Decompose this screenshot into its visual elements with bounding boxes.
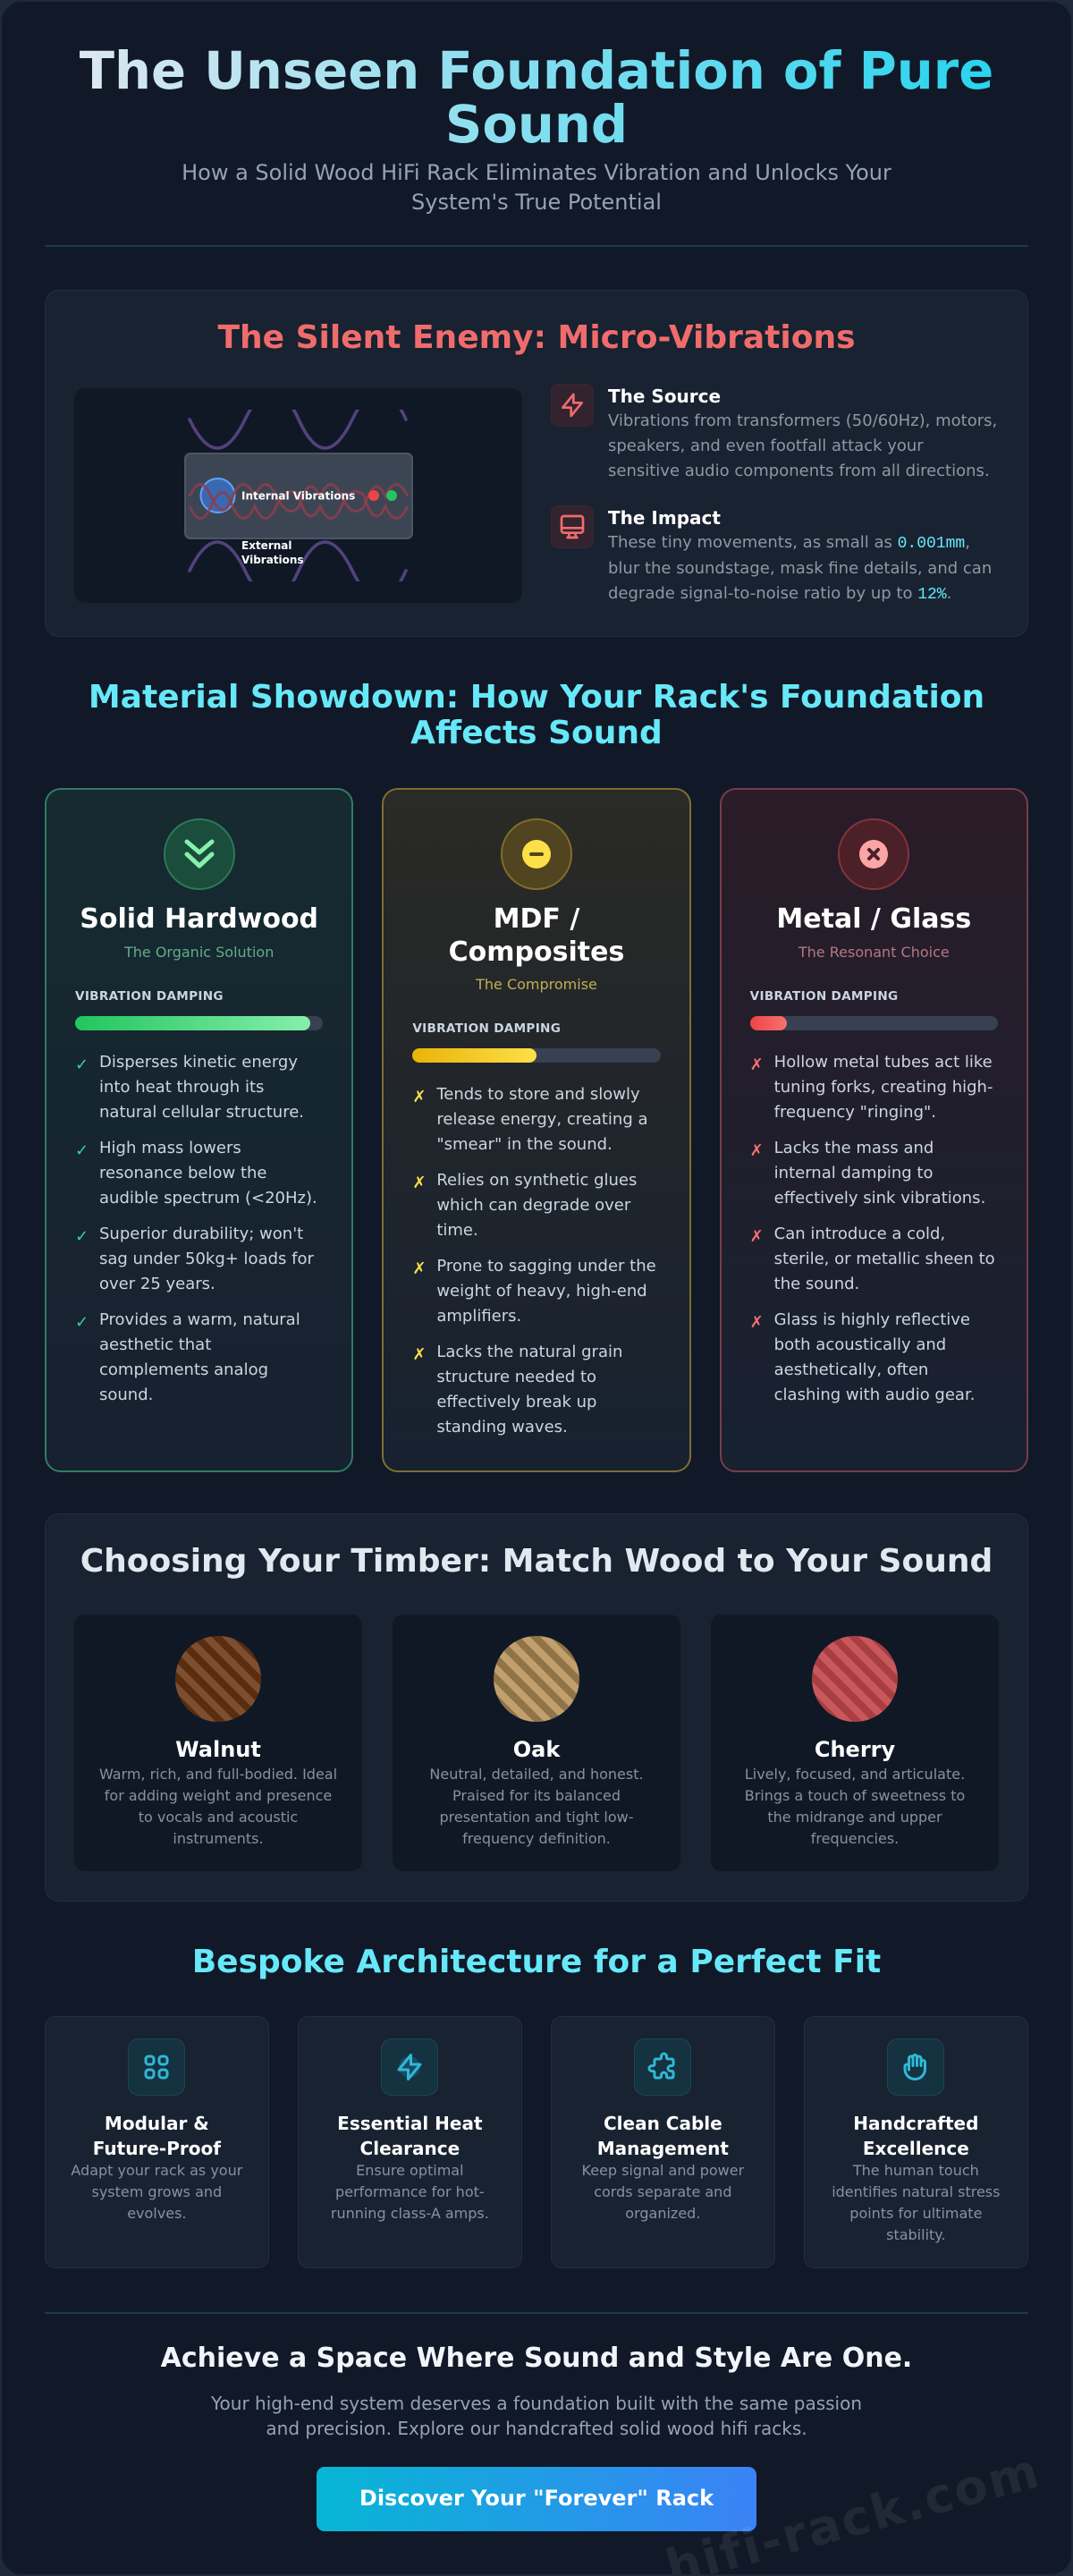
swatch: cherry: [812, 1636, 898, 1722]
text: modular: Adapt your rack as your: [71, 2162, 242, 2179]
description: cherry: [745, 1766, 965, 1847]
list: benefits: resonance below the: [99, 1164, 267, 1182]
list: drawbacks: ✗: [750, 1313, 764, 1332]
button: call to action: [317, 2467, 756, 2531]
list: drawbacks: [412, 1085, 656, 1436]
swatch: walnut: [175, 1636, 261, 1722]
text: the source: [608, 411, 997, 480]
description: cherry: Lively, focused, and articulate.: [745, 1766, 965, 1783]
card: metal glass: [720, 788, 1028, 1472]
list: benefits: into heat through its: [99, 1078, 264, 1097]
list: drawbacks: Relies on synthetic glues: [436, 1171, 637, 1190]
bar: damping 15%: [750, 1016, 998, 1030]
label: vibration damping: VIBRATION DAMPING: [75, 989, 224, 1004]
subtitle: System's True Potential: [411, 190, 662, 215]
closing text: Your high-end system deserves a foundation built with the same passion: [211, 2393, 862, 2414]
list: drawbacks: frequency "ringing".: [774, 1103, 936, 1122]
title: heat clearance: [337, 2113, 483, 2159]
wood card: cherry: [711, 1614, 999, 1871]
diagram: vibrations around component: Internal Vibrations: [241, 490, 355, 503]
icon: minus circle: [501, 818, 572, 890]
closing heading: Achieve a Space Where Sound and Style Are One.: [161, 2343, 912, 2374]
list: benefits: [75, 1053, 317, 1404]
description: oak: [429, 1766, 644, 1847]
list: benefits: ✓: [75, 1313, 89, 1332]
description: walnut: Warm, rich, and full-bodied. Ideal: [99, 1766, 337, 1783]
description: walnut: [99, 1766, 337, 1847]
text: heat clearance: running class-A amps.: [331, 2205, 489, 2222]
list: drawbacks: [750, 1053, 995, 1404]
text: the impact: These tiny movements, as small as 0.001mm,: [608, 533, 970, 553]
text: handcrafted: points for ultimate: [849, 2205, 982, 2222]
heading: material showdown: [89, 679, 984, 751]
text: the source: speakers, and even footfall attack your: [608, 436, 924, 455]
button: call to action: Discover Your "Forever" Rack: [359, 2486, 714, 2511]
title: handcrafted: Handcrafted: [853, 2113, 978, 2134]
list: drawbacks: effectively sink vibrations.: [774, 1189, 985, 1208]
closing text: and precision. Explore our handcrafted solid wood hifi racks.: [266, 2418, 807, 2439]
feature: modular: [45, 2016, 269, 2268]
title: modular: Modular &: [105, 2113, 209, 2134]
list: benefits: High mass lowers: [99, 1139, 241, 1157]
title: modular: Future-Proof: [93, 2138, 221, 2159]
material name: [449, 903, 624, 968]
feature: cable management: [551, 2016, 775, 2268]
panel: choosing your timber: [45, 1513, 1028, 1902]
list: drawbacks: Tends to store and slowly: [436, 1085, 640, 1104]
description: cherry: the midrange and upper: [767, 1809, 942, 1826]
tagline: The Compromise: [476, 976, 597, 993]
text: handcrafted: [832, 2162, 1000, 2243]
label: vibration damping: VIBRATION DAMPING: [412, 1021, 561, 1036]
feature: heat clearance: [298, 2016, 522, 2268]
list: benefits: Disperses kinetic energy: [99, 1053, 298, 1072]
list: drawbacks: ✗: [412, 1259, 426, 1278]
tagline: The Organic Solution: [124, 944, 274, 961]
list: benefits: ✓: [75, 1141, 89, 1160]
material name: Metal / Glass: [776, 903, 971, 935]
name: cherry: Cherry: [815, 1737, 895, 1762]
icon: hand: [887, 2038, 944, 2096]
list: drawbacks: Can introduce a cold,: [774, 1224, 945, 1243]
list: benefits: over 25 years.: [99, 1275, 215, 1293]
text: heat clearance: Ensure optimal: [356, 2162, 464, 2179]
description: walnut: for adding weight and presence: [105, 1787, 332, 1804]
text: the impact: degrade signal-to-noise ratio by up to 12%.: [608, 584, 951, 604]
description: oak: presentation and tight low-: [439, 1809, 633, 1826]
description: oak: Praised for its balanced: [452, 1787, 621, 1804]
heading: the source: The Source: [608, 386, 721, 407]
icon: bolt: [381, 2038, 438, 2096]
heading: the impact: The Impact: [608, 507, 721, 529]
title: modular: [93, 2113, 222, 2159]
list: drawbacks: standing waves.: [436, 1418, 568, 1436]
text: cable management: cords separate and: [594, 2183, 731, 2200]
closing text: [211, 2393, 862, 2439]
list: drawbacks: aesthetically, often: [774, 1360, 928, 1379]
title: cable management: [597, 2113, 729, 2159]
title: cable management: Clean Cable: [604, 2113, 722, 2134]
diagram: vibrations around component: [74, 388, 522, 603]
description: oak: frequency definition.: [462, 1830, 611, 1847]
list: drawbacks: internal damping to: [774, 1164, 934, 1182]
wood card: oak: [393, 1614, 680, 1871]
text: modular: system grows and: [91, 2183, 222, 2200]
heading: bespoke architecture: Bespoke Architecture for a Perfect Fit: [192, 1944, 881, 1980]
description: cherry: Brings a touch of sweetness to: [745, 1787, 965, 1804]
list: drawbacks: which can degrade over: [436, 1196, 630, 1215]
title: Sound: [445, 95, 628, 155]
icon: x circle: [838, 818, 909, 890]
list: drawbacks: clashing with audio gear.: [774, 1385, 975, 1404]
title: handcrafted: [853, 2113, 978, 2159]
list: drawbacks: ✗: [750, 1141, 764, 1160]
list: drawbacks: both acoustically and: [774, 1335, 946, 1354]
list: benefits: aesthetic that: [99, 1335, 211, 1354]
diagram: vibrations around component: External: [241, 539, 291, 552]
title: cable management: Management: [597, 2138, 729, 2159]
text: cable management: Keep signal and power: [581, 2162, 744, 2179]
text: handcrafted: The human touch: [853, 2162, 979, 2179]
card: solid hardwood: [45, 788, 353, 1472]
list: drawbacks: ✗: [412, 1088, 426, 1106]
title: [45, 45, 1028, 152]
text: the impact: [608, 533, 992, 604]
list: benefits: audible spectrum (<20Hz).: [99, 1189, 317, 1208]
name: walnut: Walnut: [175, 1737, 261, 1762]
list: benefits: Provides a warm, natural: [99, 1310, 300, 1329]
list: drawbacks: the sound.: [774, 1275, 859, 1293]
icon: monitor impact: [551, 505, 594, 548]
list: benefits: Superior durability; won't: [99, 1224, 303, 1243]
list: drawbacks: amplifiers.: [436, 1307, 521, 1326]
description: cherry: frequencies.: [811, 1830, 899, 1847]
icon: lightning source: [551, 384, 594, 427]
list: benefits: ✓: [75, 1227, 89, 1246]
text: the source: Vibrations from transformers (50/60Hz), motors,: [608, 411, 997, 430]
list: drawbacks: sterile, or metallic sheen to: [774, 1250, 995, 1268]
subtitle: [182, 160, 891, 215]
list: benefits: ✓: [75, 1055, 89, 1074]
list: benefits: complements analog: [99, 1360, 268, 1379]
list: drawbacks: "smear" in the sound.: [436, 1135, 613, 1154]
heading: material showdown: Affects Sound: [410, 715, 663, 751]
name: oak: Oak: [513, 1737, 560, 1762]
icon: puzzle: [634, 2038, 691, 2096]
diagram: vibrations around component: Vibrations: [241, 554, 304, 566]
list: drawbacks: time.: [436, 1221, 478, 1240]
list: drawbacks: Prone to sagging under the: [436, 1257, 656, 1275]
title: handcrafted: Excellence: [863, 2138, 969, 2159]
bar: damping 50%: [412, 1048, 661, 1063]
icon: grid: [128, 2038, 185, 2096]
text: the source: sensitive audio components from all directions.: [608, 462, 990, 480]
text: handcrafted: identifies natural stress: [832, 2183, 1000, 2200]
text: handcrafted: stability.: [886, 2226, 946, 2243]
description: walnut: instruments.: [173, 1830, 264, 1847]
swatch: oak: [494, 1636, 579, 1722]
list: drawbacks: Lacks the mass and: [774, 1139, 934, 1157]
title: The Unseen Foundation of Pure: [80, 41, 993, 101]
list: drawbacks: structure needed to: [436, 1368, 596, 1386]
list: drawbacks: tuning forks, creating high-: [774, 1078, 993, 1097]
list: drawbacks: ✗: [412, 1345, 426, 1364]
list: drawbacks: ✗: [750, 1227, 764, 1246]
title: heat clearance: Essential Heat: [337, 2113, 483, 2134]
description: oak: Neutral, detailed, and honest.: [429, 1766, 644, 1783]
description: walnut: to vocals and acoustic: [139, 1809, 298, 1826]
list: benefits: natural cellular structure.: [99, 1103, 304, 1122]
text: the impact: blur the soundstage, mask fine details, and can: [608, 559, 992, 578]
list: benefits: sound.: [99, 1385, 153, 1404]
text: modular: [71, 2162, 243, 2222]
heading: material showdown: Material Showdown: How Your Rack's Foundation: [89, 679, 984, 716]
text: heat clearance: performance for hot-: [335, 2183, 485, 2200]
icon: double chevron: [164, 818, 235, 890]
material name: Composites: [449, 936, 624, 968]
list: drawbacks: effectively break up: [436, 1393, 596, 1411]
material name: MDF /: [494, 903, 579, 935]
text: cable management: [581, 2162, 744, 2222]
list: drawbacks: release energy, creating a: [436, 1110, 647, 1129]
list: drawbacks: Lacks the natural grain: [436, 1343, 622, 1361]
list: drawbacks: ✗: [750, 1055, 764, 1074]
feature: handcrafted: [804, 2016, 1028, 2268]
tagline: The Resonant Choice: [798, 944, 950, 961]
title: heat clearance: Clearance: [360, 2138, 460, 2159]
text: heat clearance: [331, 2162, 489, 2222]
list: benefits: sag under 50kg+ loads for: [99, 1250, 314, 1268]
bar: damping 95%: [75, 1016, 323, 1030]
heading: choosing your timber: Choosing Your Timber: Match Wood to Your Sound: [80, 1543, 993, 1580]
wood card: walnut: [74, 1614, 362, 1871]
list: drawbacks: Hollow metal tubes act like: [774, 1053, 993, 1072]
list: drawbacks: weight of heavy, high-end: [436, 1282, 647, 1301]
text: modular: evolves.: [127, 2205, 186, 2222]
panel: micro-vibrations: [45, 290, 1028, 637]
list: drawbacks: ✗: [412, 1174, 426, 1192]
label: vibration damping: VIBRATION DAMPING: [750, 989, 899, 1004]
subtitle: How a Solid Wood HiFi Rack Eliminates Vibration and Unlocks Your: [182, 160, 891, 185]
card: mdf composites: [382, 788, 691, 1472]
text: cable management: organized.: [625, 2205, 700, 2222]
heading: the silent enemy: The Silent Enemy: Micro-Vibrations: [217, 319, 856, 356]
list: drawbacks: Glass is highly reflective: [774, 1310, 970, 1329]
material name: Solid Hardwood: [80, 903, 318, 935]
